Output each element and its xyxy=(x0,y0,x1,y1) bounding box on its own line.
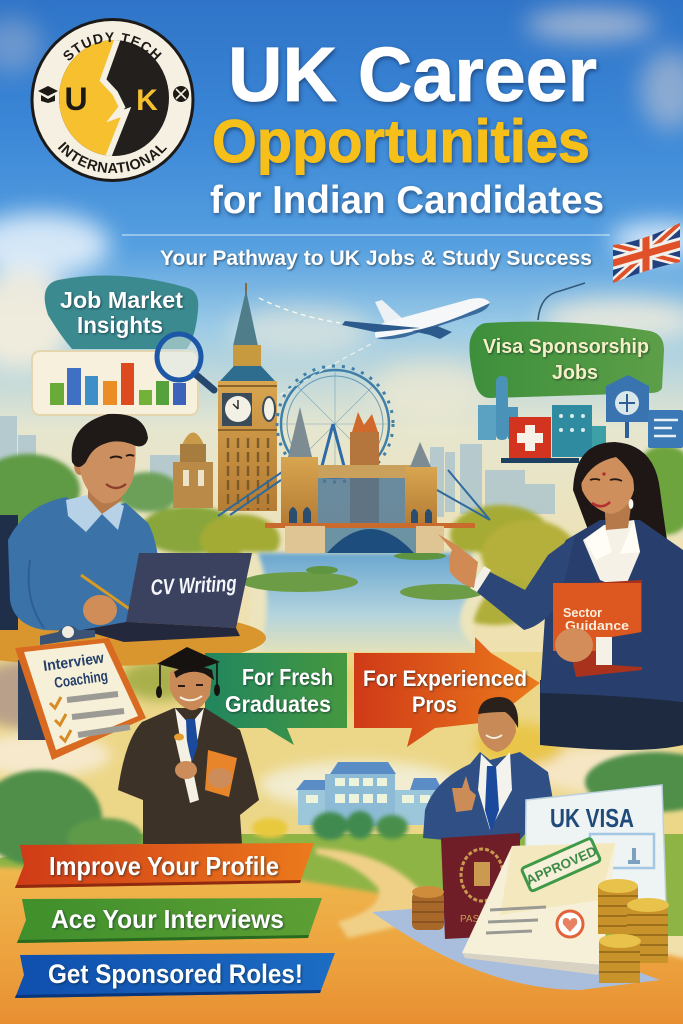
distant campus building xyxy=(296,762,443,826)
passport xyxy=(441,833,520,939)
skirt xyxy=(540,680,683,750)
lawn xyxy=(0,834,683,936)
legs under table xyxy=(18,660,48,740)
thumbs-up hand xyxy=(452,776,476,812)
clipboard: interview coaching: Coaching xyxy=(53,668,109,692)
london eye xyxy=(277,366,393,482)
passport: PASS xyxy=(460,914,486,925)
button: improve your profile xyxy=(15,843,314,888)
icon: airplane with dashed flight path xyxy=(259,283,585,395)
visa card: UK VISA xyxy=(550,803,634,833)
button: ace your interviews xyxy=(17,898,322,943)
coin stack small xyxy=(412,886,444,930)
pointing hand xyxy=(438,534,478,588)
skyline xyxy=(0,416,555,517)
clipboard: interview coaching: Interview xyxy=(42,650,105,675)
divider xyxy=(122,234,610,236)
ground and path xyxy=(0,866,683,1024)
table xyxy=(0,610,266,666)
logo: Study Tech International xyxy=(30,18,194,182)
bubble text xyxy=(60,287,183,338)
laptop: CV writing xyxy=(82,553,252,642)
person: experienced professional xyxy=(423,697,553,840)
book: Sector xyxy=(563,605,602,620)
trees behind the landmarks xyxy=(0,445,683,625)
head xyxy=(88,470,122,514)
banner: for fresh graduates xyxy=(205,653,347,745)
button: ace your interviews: Ace Your Interviews xyxy=(51,904,284,934)
icon: graduation cap xyxy=(38,86,58,103)
title: for Indian Candidates xyxy=(210,179,604,222)
scroll and folder xyxy=(174,734,237,803)
gown xyxy=(118,708,259,844)
banner: for fresh graduates: For Fresh xyxy=(242,664,333,690)
button: get sponsored roles xyxy=(15,953,335,998)
icon: crossed tools xyxy=(173,86,189,102)
subtitle: Your Pathway to UK Jobs & Study Success xyxy=(160,247,592,270)
mid meadow xyxy=(0,652,683,852)
bubble text: Jobs xyxy=(552,362,598,384)
icon: magnifying glass xyxy=(157,334,214,390)
button: improve your profile: Improve Your Profile xyxy=(49,851,279,881)
logo: Study Tech International: U xyxy=(64,81,88,117)
banner: for experienced pros: Pros xyxy=(412,692,457,717)
button: get sponsored roles: Get Sponsored Roles! xyxy=(48,959,303,989)
panel: uk visa documents and coins xyxy=(372,785,669,990)
speech bubble xyxy=(45,276,198,349)
banner: for experienced pros xyxy=(354,637,540,747)
visa card xyxy=(525,785,666,905)
logo: Study Tech International: STUDY TECH xyxy=(64,32,162,60)
panel: visa sponsorship jobs xyxy=(469,322,683,463)
mortarboard xyxy=(156,647,220,698)
sweater xyxy=(8,497,160,632)
clipboard: interview coaching xyxy=(15,625,146,760)
bubble text: Visa Sponsorship xyxy=(483,336,649,358)
clock faces xyxy=(222,393,275,426)
icon: union jack flag xyxy=(613,223,680,283)
river and shores xyxy=(240,552,505,665)
title: Opportunities xyxy=(212,108,590,175)
head xyxy=(478,711,516,752)
logo: Study Tech International: INTERNATIONAL xyxy=(58,142,167,173)
approved stamp: APPROVED xyxy=(524,843,599,888)
person: woman with sector guidance book xyxy=(438,442,683,750)
left tower xyxy=(281,407,318,525)
title: UK Career xyxy=(228,32,597,118)
base sheet xyxy=(372,905,660,990)
hair back xyxy=(573,442,667,545)
book: Guidance xyxy=(565,618,629,633)
banner: for experienced pros: For Experienced xyxy=(363,666,527,691)
checklist xyxy=(50,694,130,741)
banner: for fresh graduates: Graduates xyxy=(225,691,331,717)
tower bridge xyxy=(218,407,490,553)
panel: job market insights xyxy=(32,276,214,415)
book xyxy=(553,580,642,677)
title xyxy=(210,32,604,222)
speech bubble xyxy=(469,322,664,398)
extended arm xyxy=(477,535,575,630)
hair xyxy=(72,414,148,467)
head xyxy=(604,500,632,530)
approved letter xyxy=(462,838,616,975)
right tower xyxy=(405,442,437,525)
tree line xyxy=(0,752,683,866)
person: man at laptop xyxy=(0,414,160,740)
jacket xyxy=(540,520,683,702)
bubble text: Job Market xyxy=(60,287,183,313)
logo: Study Tech International: K xyxy=(136,84,158,117)
suit xyxy=(423,752,553,840)
head xyxy=(170,667,212,710)
person: graduate xyxy=(118,647,259,844)
holding hand xyxy=(555,628,593,662)
writing hand and pencil xyxy=(81,575,131,625)
blouse xyxy=(583,520,640,590)
coin stacks large xyxy=(598,879,669,983)
domed tower xyxy=(173,432,213,508)
bubble text: Insights xyxy=(77,312,163,338)
big ben tower xyxy=(218,283,277,511)
icons: city, hospital, office, sign xyxy=(478,375,683,463)
bar chart xyxy=(32,351,198,415)
bubble text xyxy=(483,336,649,384)
laptop: CV writing: CV Writing xyxy=(150,571,238,600)
